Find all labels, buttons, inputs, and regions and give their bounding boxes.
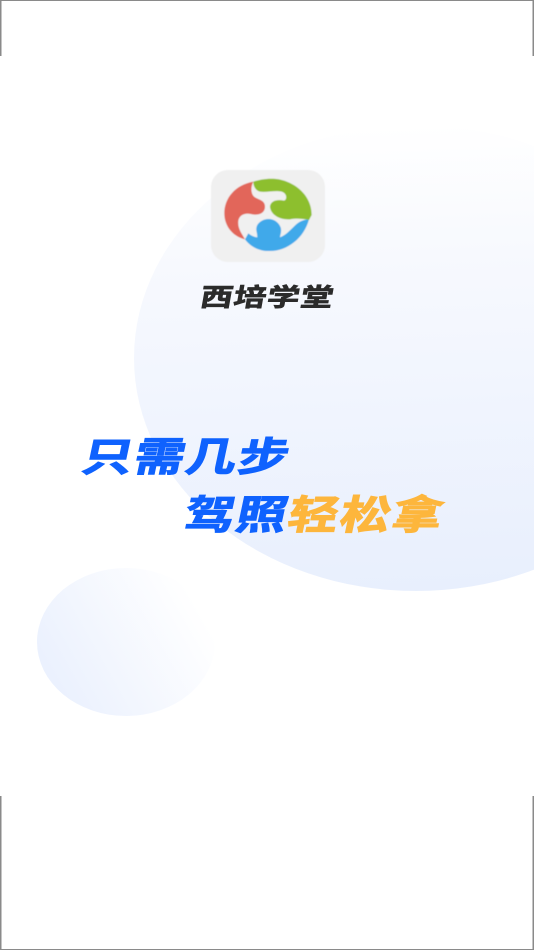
app name: 西培学堂 (198, 284, 337, 312)
background circle: small (37, 568, 215, 716)
headline line 2: 驾照轻松拿 (180, 492, 449, 538)
headline line 1: 只需几步 (78, 434, 295, 480)
icon: app logo (211, 170, 325, 262)
logo: blue arc and figure (245, 219, 309, 251)
logo: green arc and figure (253, 179, 312, 220)
logo: red arc and figure (224, 182, 265, 239)
background circle: large (134, 125, 534, 591)
